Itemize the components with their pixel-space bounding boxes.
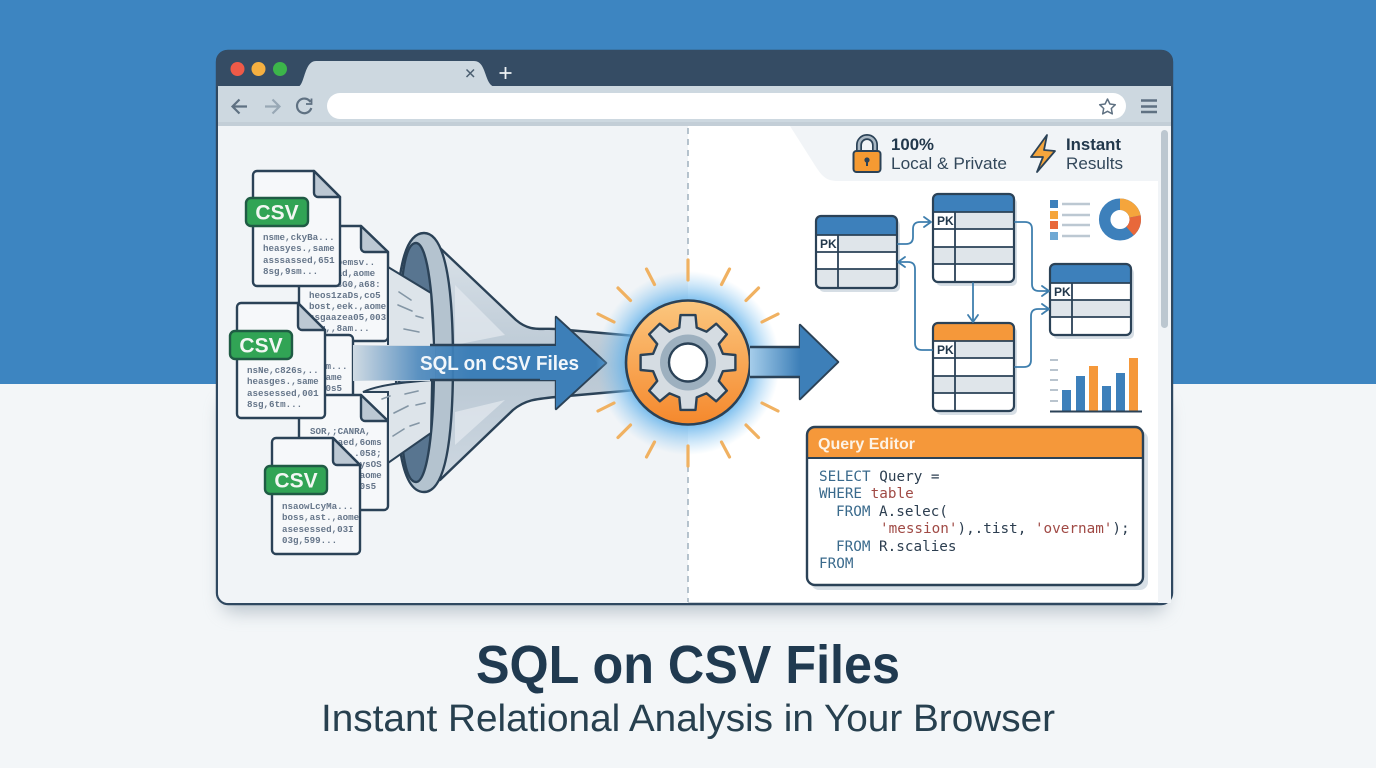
SQL code — [819, 469, 1130, 572]
file with CSV badge 3 — [265, 438, 360, 554]
back file 2: am... — [320, 361, 348, 372]
back file 3: SOR,;CANRA, — [310, 426, 371, 437]
back file 1: heos1zaDs,co5 — [309, 290, 381, 301]
window controls — [230, 62, 287, 76]
file with CSV badge 3: CSV — [274, 470, 318, 492]
active tab — [298, 61, 495, 87]
background: blue upper band — [0, 0, 1376, 384]
file with CSV badge 2: heasges.,same — [247, 376, 319, 387]
connectors between tables — [898, 217, 1049, 367]
back file 3: hesyaaed,6oms — [310, 437, 382, 448]
editor panel — [807, 427, 1143, 585]
editor header — [807, 427, 1143, 458]
menu icon — [1141, 100, 1157, 112]
file with CSV badge 2: CSV — [239, 334, 283, 358]
title bar — [216, 50, 1173, 87]
back file 1: hsme,oemsv.. — [309, 257, 375, 268]
SQL code: 'mession'),.tist, 'overnam'); — [880, 521, 1130, 537]
file with CSV badge 1: asssassed,651 — [263, 255, 335, 266]
back file 1: heasyad,aome — [309, 268, 376, 279]
funnel cone — [440, 248, 636, 480]
back file 3: heas,,,,,ysOS — [310, 459, 382, 470]
address bar — [327, 93, 1126, 119]
file with CSV badge 1: 8sg,9sm... — [263, 266, 318, 277]
tab close icon — [466, 70, 474, 77]
title: SQL on CSV Files — [476, 635, 900, 695]
toolbar edge — [218, 122, 1171, 126]
file with CSV badge 1: CSV — [255, 202, 299, 224]
browser window — [216, 50, 1173, 604]
gear teeth — [641, 315, 735, 410]
paper stream: upper — [388, 267, 434, 346]
table 4: PK — [1054, 285, 1071, 299]
forward arrow — [265, 100, 280, 114]
panel background — [790, 126, 1158, 181]
SQL code: FROM R.scalies — [836, 539, 957, 555]
table 2 — [933, 194, 1017, 286]
icon: padlock — [854, 137, 880, 172]
text: local and private: 100% — [891, 135, 934, 154]
query editor — [807, 427, 1148, 590]
editor title: Query Editor — [818, 436, 915, 453]
gear hole — [669, 344, 707, 382]
subtitle: Instant Relational Analysis in Your Browser — [321, 698, 1055, 740]
back file 3: sassess,.058; — [310, 448, 382, 459]
file with CSV badge 1 — [246, 171, 340, 286]
arrow outline and head — [430, 317, 606, 409]
donut chart — [1105, 204, 1135, 235]
back file 2: ,0s5 — [320, 383, 343, 394]
file with CSV badge 3: boss,ast.,aome — [282, 512, 360, 523]
main arrow with label — [355, 317, 606, 409]
back file 2: same — [320, 372, 343, 383]
text: instant results — [1066, 135, 1123, 173]
file with CSV badge 2: nsNe,c826s,.. — [247, 365, 319, 376]
back file 1: assassG0,a68: — [309, 279, 381, 290]
SQL code: FROM — [819, 556, 853, 572]
funnel opening — [399, 243, 434, 482]
back file 3 — [299, 395, 388, 510]
table 3 (orange) — [933, 323, 1017, 415]
background: pale lower band — [0, 384, 1376, 768]
table 4 — [1050, 264, 1134, 339]
paper stream: lower — [363, 380, 432, 463]
table 1: PK — [820, 237, 837, 251]
processing gear — [596, 260, 780, 466]
glow — [596, 271, 780, 455]
file with CSV badge 2: 8sg,6tm... — [247, 399, 302, 410]
back file 3: asseses,,0s5 — [310, 481, 377, 492]
back file 1: asg,,8am... — [309, 323, 370, 334]
back file 1: bost,eek.,aome — [309, 301, 387, 312]
back file 3: bosse,,,,aome — [310, 470, 382, 481]
back file 2 — [303, 335, 353, 411]
back arrow — [232, 100, 247, 114]
cone highlight — [455, 285, 505, 445]
bar chart — [1050, 358, 1142, 412]
left content pane — [218, 126, 688, 603]
table 2: PK — [937, 214, 954, 228]
text: instant results: Results — [1066, 154, 1123, 173]
back file 1: ssgaazea05,003 — [309, 312, 387, 323]
new tab icon — [500, 67, 512, 79]
orange disc — [626, 300, 750, 424]
text: instant results: Instant — [1066, 135, 1121, 154]
sun rays — [598, 260, 778, 466]
SQL code: SELECT Query = — [819, 469, 940, 485]
SQL code: WHERE table — [819, 486, 914, 502]
output arrow — [750, 325, 838, 399]
editor shadow — [811, 431, 1148, 590]
icon: lightning bolt — [1031, 135, 1055, 172]
benefits panel — [790, 126, 1158, 181]
text: local and private — [891, 135, 1007, 173]
file with CSV badge 3: 03g,599... — [282, 535, 337, 546]
divider — [687, 128, 689, 602]
scrollbar — [1158, 126, 1171, 603]
file with CSV badge 3: asesessed,03I — [282, 524, 354, 535]
file with CSV badge 1: heasyes.,same — [263, 243, 335, 254]
toolbar — [218, 86, 1171, 126]
window shadow — [222, 400, 1166, 612]
paper stream: centre band — [353, 345, 435, 381]
table 1 — [816, 216, 900, 292]
legend — [1050, 200, 1090, 240]
funnel — [396, 233, 636, 492]
back file 1 — [299, 226, 388, 341]
table 3 (orange): PK — [937, 343, 954, 357]
file with CSV badge 1: nsme,ckyBa... — [263, 232, 335, 243]
file with CSV badge 3: nsaowLcyMa... — [282, 501, 354, 512]
funnel rim — [396, 233, 453, 492]
file with CSV badge 2: asesessed,001 — [247, 388, 319, 399]
file with CSV badge 2 — [230, 303, 325, 418]
gear hub — [660, 334, 716, 390]
reload icon — [297, 98, 312, 113]
window frame — [217, 51, 1172, 604]
arrow label: SQL on CSV Files — [420, 353, 579, 375]
arrow fade body — [355, 346, 557, 380]
star icon — [1100, 99, 1115, 114]
text: local and private: Local & Private — [891, 154, 1007, 173]
SQL code: FROM A.selec( — [836, 504, 948, 520]
